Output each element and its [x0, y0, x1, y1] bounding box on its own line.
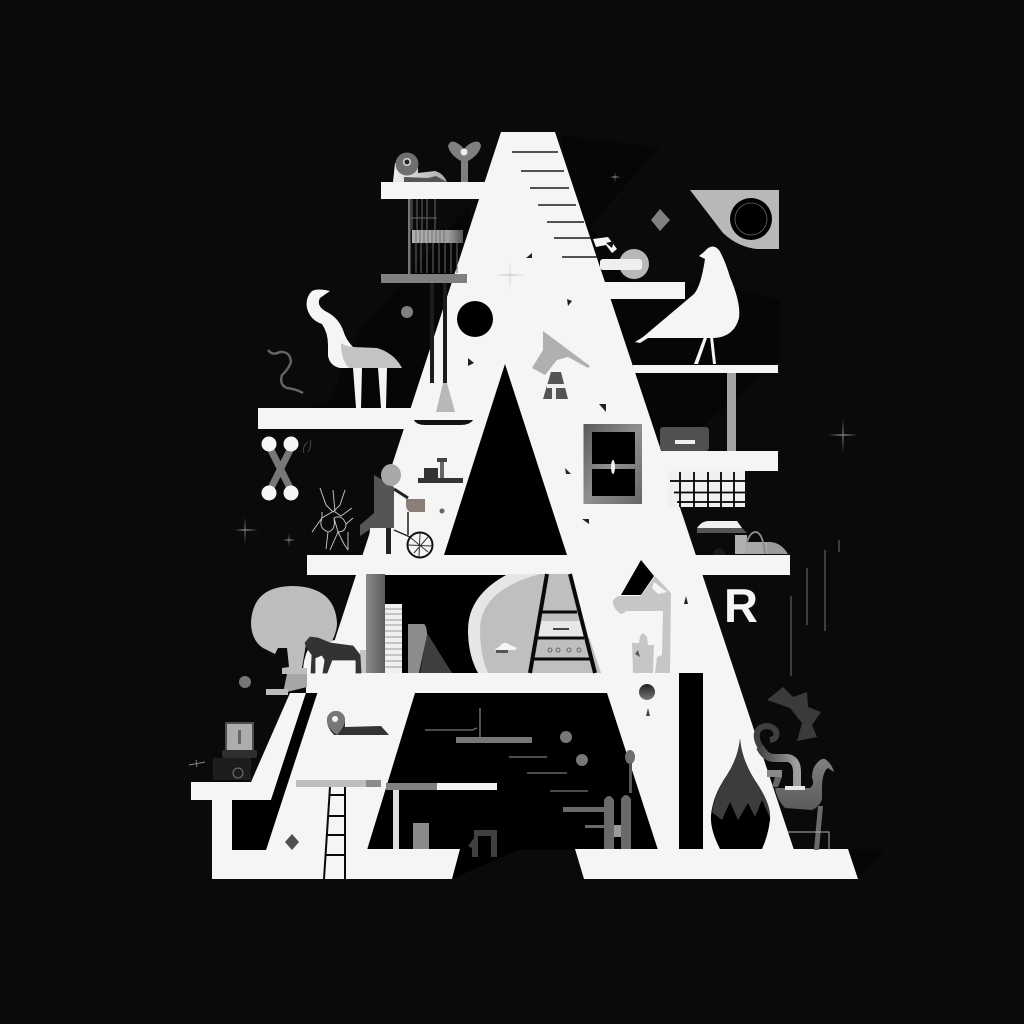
- icon: floating lines and dots: [425, 708, 635, 793]
- counter: lower trapezoid: [367, 693, 658, 850]
- icon: person with wheel: [360, 464, 432, 558]
- right base: [575, 849, 858, 879]
- icon: window frame: [584, 424, 642, 504]
- small dots and triangles on the A: [440, 253, 688, 604]
- left side support and base: [191, 693, 460, 879]
- table with box and stool in lower bay: [386, 783, 497, 857]
- icon: dark dog: [305, 637, 361, 673]
- counter: upper triangle: [444, 364, 567, 555]
- diagonal shadows: [258, 135, 885, 879]
- icon: small grey dot: [401, 306, 413, 318]
- black vertical bar: [679, 673, 703, 849]
- icon: dark box on shelf: [660, 427, 709, 451]
- icon: black drop: [639, 684, 655, 716]
- icon: white bird: [635, 246, 739, 364]
- icon: swirl-necked stool creature: [307, 290, 402, 408]
- icon: short ladder to base: [324, 787, 345, 879]
- icon: items under right shelf: [697, 521, 788, 555]
- icon: mushroom tree: [251, 586, 366, 695]
- counter: middle bay: [366, 574, 601, 674]
- icon: monitor on speaker: [189, 722, 257, 780]
- icon: black circle: [457, 301, 493, 337]
- icon: tall ladder: [530, 574, 595, 673]
- icon: pipe and sphere at right of apex: [593, 237, 649, 279]
- icon: dark gear crescent: [767, 687, 821, 741]
- icon: roll on top shelf: [393, 152, 447, 182]
- shelves: [258, 182, 790, 693]
- table post: [727, 373, 736, 451]
- thin vertical lines at right: [791, 540, 839, 676]
- icon: crossed bones X: [262, 436, 311, 500]
- icon: chair posts: [563, 795, 631, 849]
- label: letter R: R: [724, 579, 758, 632]
- decorative sparkles: [235, 172, 858, 547]
- icon: small wall shelf with objects: [418, 458, 463, 483]
- icon: swirl pipe and grey bucket chair: [757, 726, 834, 850]
- icon: book stack: [366, 574, 452, 673]
- letter A main body: [266, 132, 794, 850]
- icon: pin figure on leg: [327, 711, 389, 735]
- icon: small diamond: [651, 209, 670, 231]
- icon: dark diamond: [285, 834, 299, 850]
- icon: grey squiggle: [268, 350, 303, 393]
- icon: large disc behind ladder: [468, 574, 601, 673]
- icon: funnel and small ladder: [532, 331, 590, 399]
- icon: geometric eye: [690, 190, 779, 249]
- icon: black triangle and grey arm with figure: [613, 560, 671, 673]
- icon: cracked network: [312, 488, 353, 550]
- icon: lamp with long poles: [414, 283, 473, 425]
- icon: white tile grid: [668, 471, 745, 507]
- ruler dashes on apex: [512, 152, 597, 257]
- icon: cage under shelf: [408, 199, 463, 274]
- icon: y-shaped plant: [448, 142, 481, 182]
- icon: grey dot left: [239, 676, 251, 688]
- grey shelf above ladder: [296, 780, 381, 787]
- icon: vase with flame: [711, 739, 770, 849]
